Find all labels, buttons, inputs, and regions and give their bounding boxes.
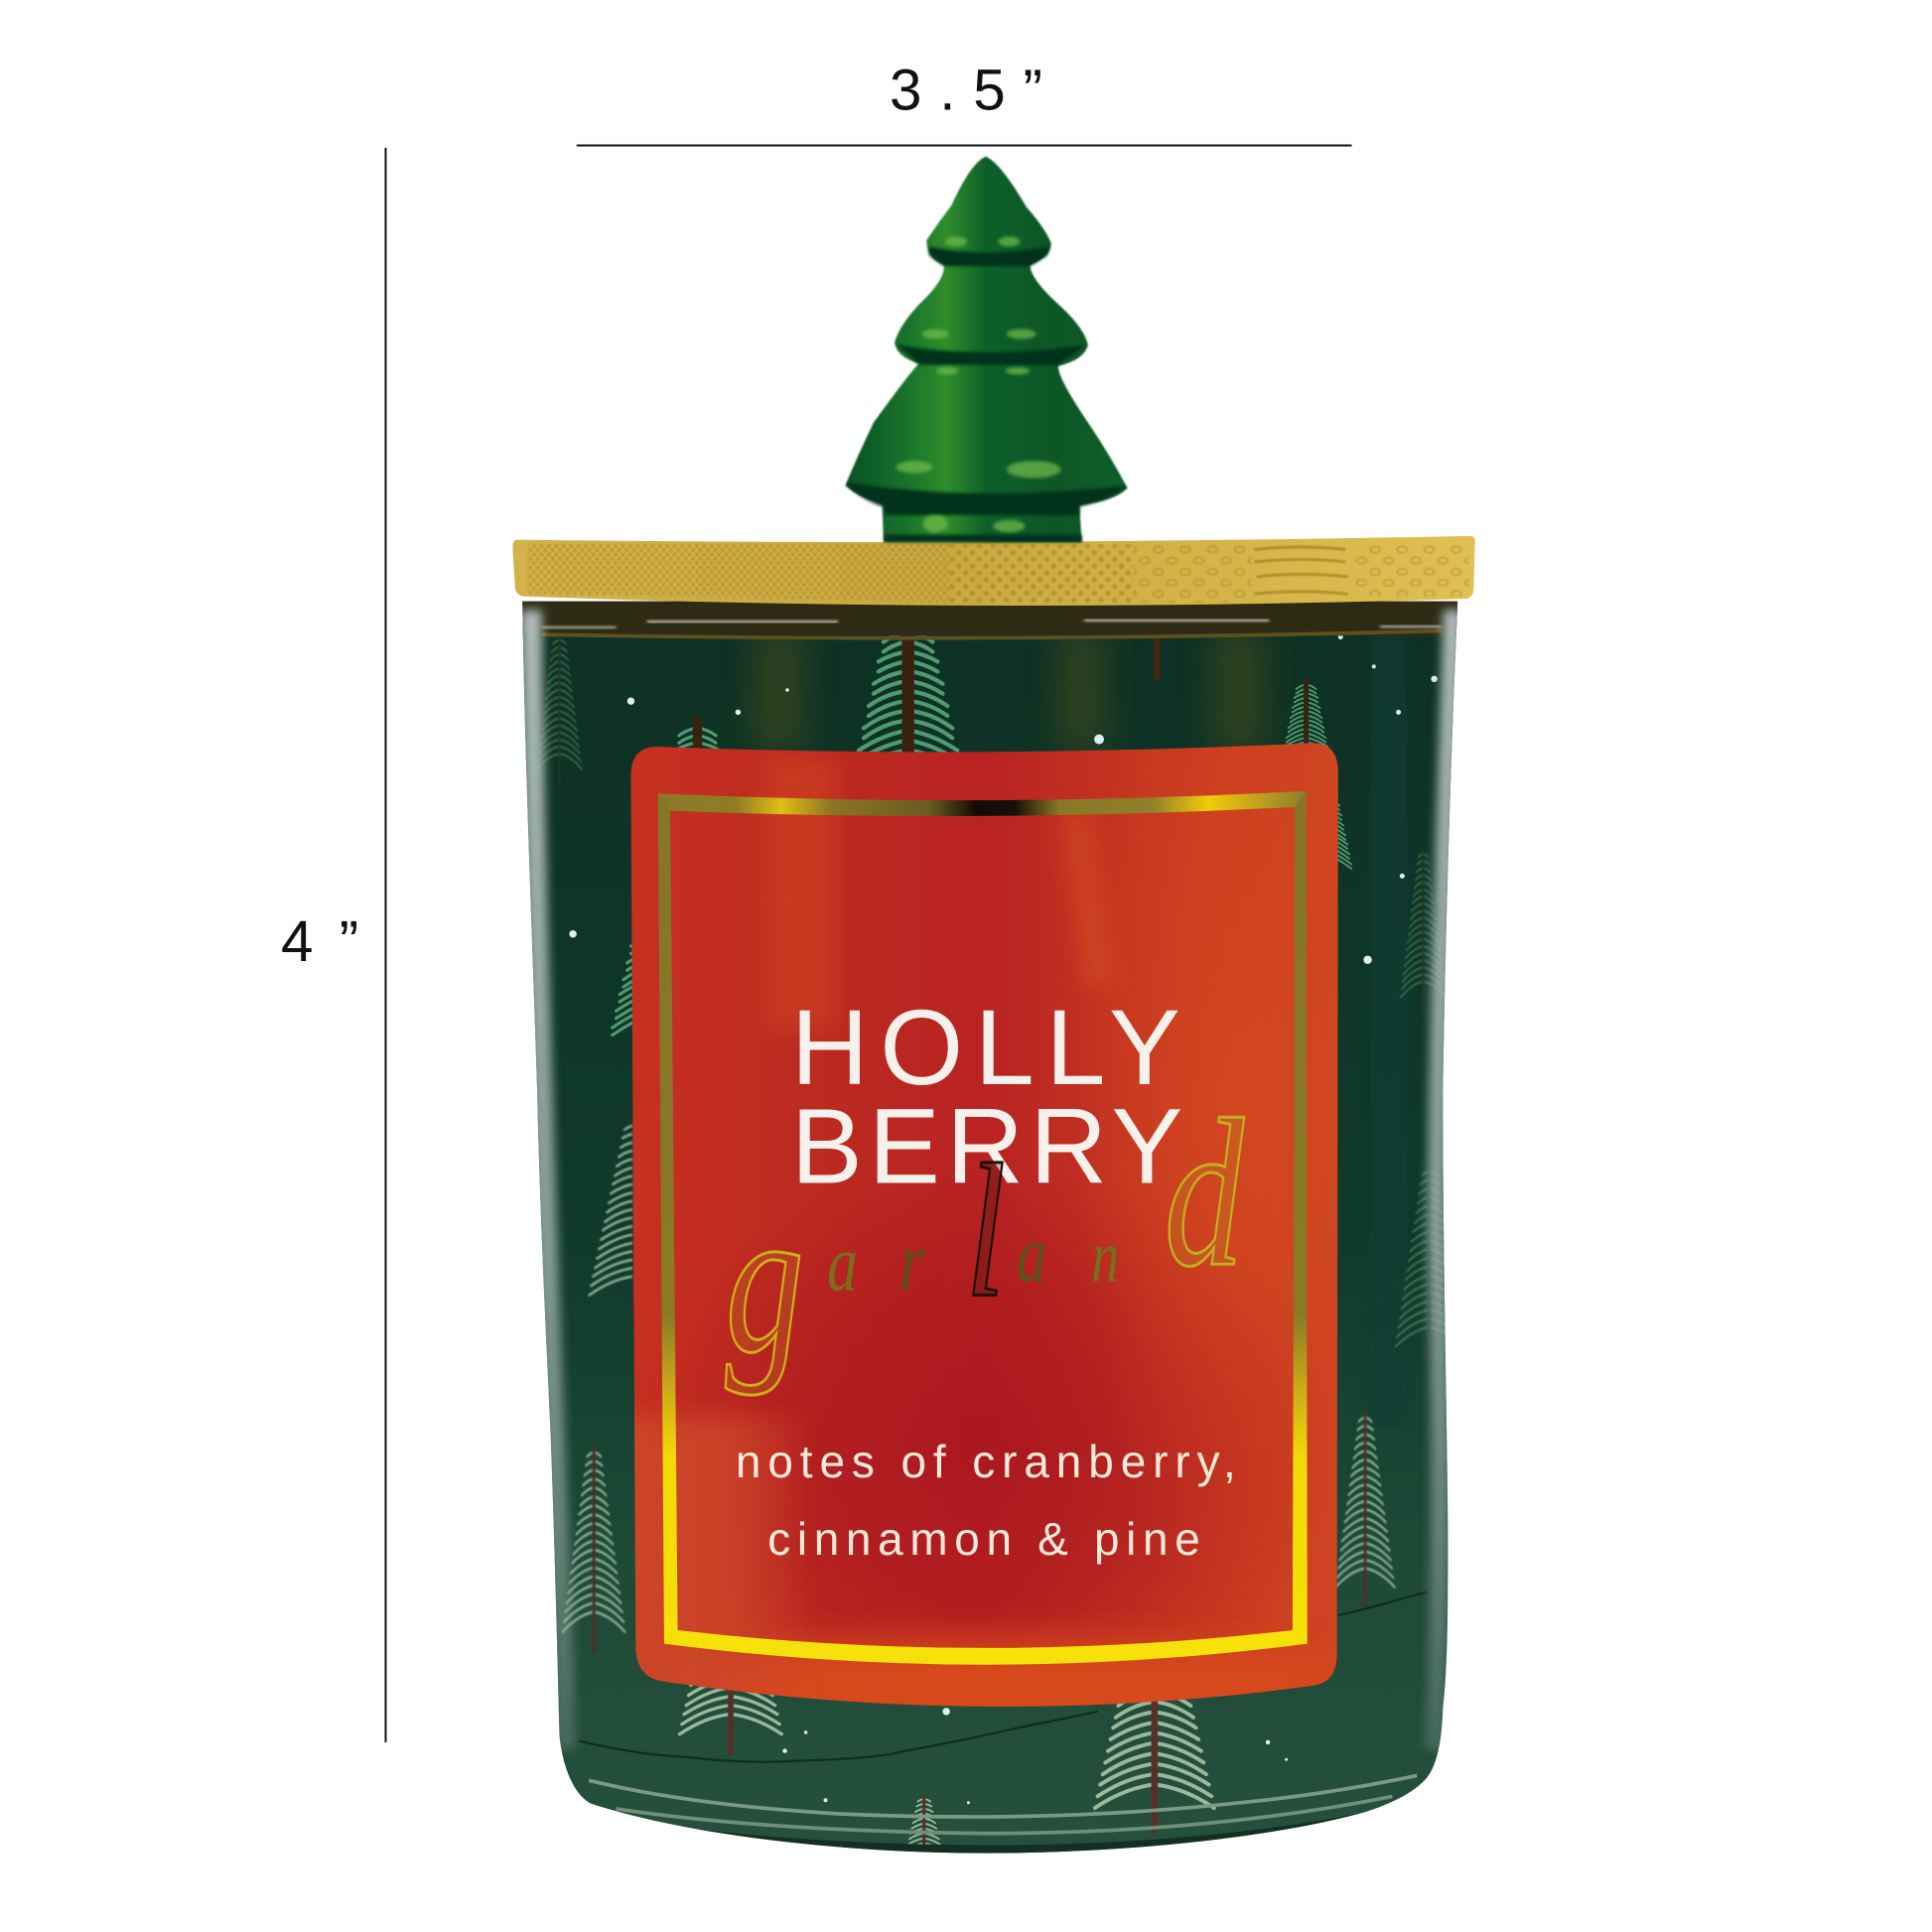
pine trees at lower sides [563, 1119, 1395, 1653]
gold script word: d [1165, 1075, 1244, 1311]
trunk fragment [1154, 635, 1161, 680]
gold foil frame [658, 791, 1308, 1665]
glass rim [517, 602, 1466, 638]
label colour wash [567, 617, 1405, 1749]
candle jar [517, 602, 1466, 1910]
height dimension line [384, 148, 386, 1742]
knob shadow bands [848, 246, 1126, 542]
faint pine trees at the edges [537, 621, 1463, 1367]
width dimension line [577, 144, 1351, 146]
glass edge highlights [531, 610, 1452, 1749]
red label [630, 743, 1338, 1707]
wrap cracks [579, 1591, 1427, 1762]
scent notes [736, 1436, 1236, 1565]
dark teal side band [1374, 639, 1404, 1042]
gold script word: a [827, 1217, 858, 1309]
gold script word: a [1017, 1208, 1047, 1300]
snow stars [569, 634, 1438, 1804]
knob silhouette [845, 157, 1128, 542]
scent notes: cinnamon & pine [767, 1513, 1200, 1565]
knob highlights [896, 236, 1061, 532]
glass body [522, 602, 1457, 1854]
height dimension label: 4” [281, 909, 358, 974]
jar interior artwork [517, 602, 1466, 1910]
product name: BERRY [791, 1085, 1182, 1205]
bamboo lid [512, 536, 1475, 606]
width dimension label: 3.5” [890, 58, 1042, 122]
pine trees at bottom [677, 1685, 1216, 1853]
olive reflections [755, 628, 1263, 752]
gold script word: g [726, 1166, 804, 1397]
bottom glass lip [589, 1775, 1417, 1850]
lid base [512, 536, 1475, 606]
pine trees at top [611, 635, 1352, 1036]
product name: HOLLY [791, 987, 1180, 1107]
gold script word: n [1091, 1216, 1119, 1299]
scent notes: notes of cranberry, [736, 1436, 1236, 1487]
gold script word: l [966, 1124, 1006, 1336]
label background [630, 743, 1338, 1707]
lid grain lines [1254, 547, 1348, 594]
gold script word: r [899, 1213, 925, 1310]
tree shaped lid knob [845, 157, 1128, 542]
lid grain [527, 542, 1468, 603]
product name [791, 987, 1182, 1205]
